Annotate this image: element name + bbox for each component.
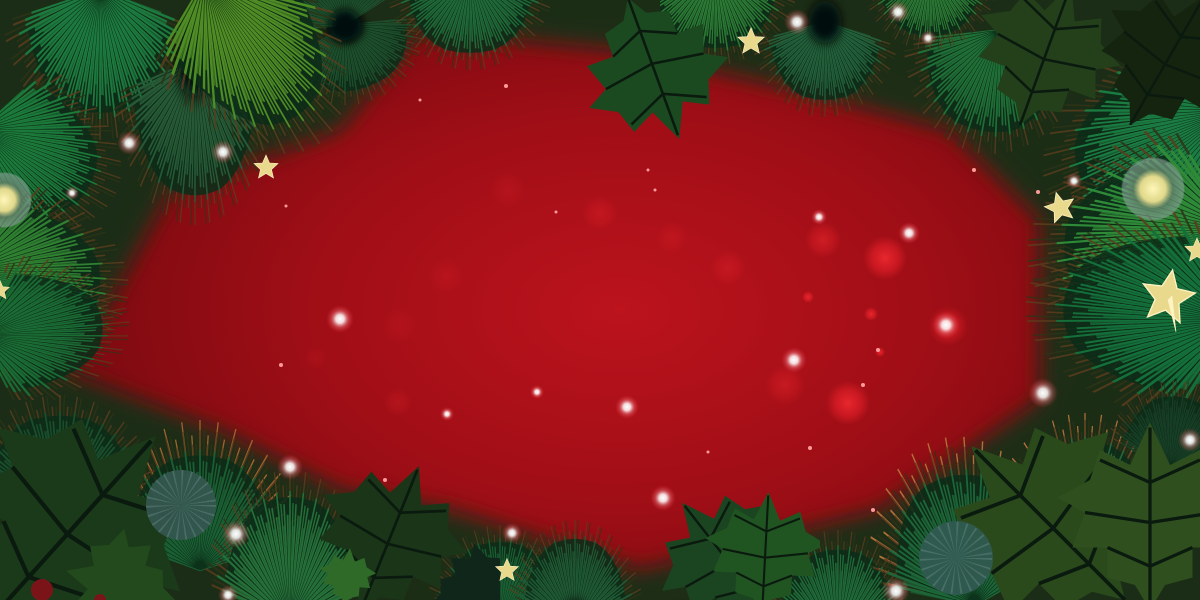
pine branches: bottom [0, 380, 1200, 600]
pine branches: top right [660, 0, 1058, 154]
holly leaves: top right [979, 0, 1200, 125]
pine branches: right side [1026, 66, 1200, 406]
glowing lamps [0, 157, 1185, 228]
tiny glitter dots [279, 84, 1040, 512]
red berries [31, 579, 106, 600]
glass baubles [146, 470, 993, 595]
bokeh lights [312, 181, 966, 423]
holly leaf: top centre [587, 0, 728, 139]
holly leaves: bottom right [953, 423, 1200, 600]
pine branches: left side [0, 73, 130, 400]
holly leaves: bottom centre [662, 492, 820, 600]
pine branches: top left [4, 0, 550, 225]
holly leaves: bottom left [0, 419, 500, 600]
